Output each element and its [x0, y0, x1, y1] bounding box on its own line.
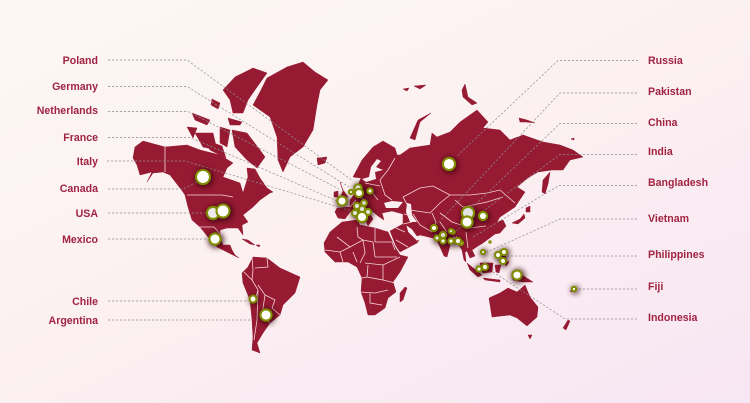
- labels: right column: [648, 55, 708, 324]
- world map: [133, 62, 583, 353]
- label: Canada: Canada: [60, 183, 98, 195]
- country borders: [165, 147, 515, 340]
- Eurasia: [335, 110, 583, 262]
- Arctic islands: [223, 68, 267, 113]
- Caribbean: [242, 239, 255, 245]
- label: Germany: Germany: [52, 81, 98, 93]
- label: Fiji: Fiji: [648, 281, 663, 293]
- label: Italy: Italy: [77, 156, 98, 168]
- Australia: [489, 285, 538, 326]
- Greenland: [253, 62, 328, 172]
- New Zealand: [563, 320, 570, 330]
- label: Mexico: Mexico: [62, 234, 99, 246]
- label: Poland: Poland: [63, 55, 98, 67]
- South America: [242, 257, 300, 353]
- Sakhalin and Japan: [542, 172, 550, 194]
- label: Bangladesh: Bangladesh: [648, 177, 708, 189]
- Fiji: [570, 291, 572, 292]
- markers: Asia: [431, 158, 487, 245]
- Africa: [324, 220, 408, 315]
- label: Russia: Russia: [648, 55, 683, 67]
- Iceland: [317, 157, 327, 165]
- North America: [133, 141, 273, 258]
- label: Vietnam: Vietnam: [648, 213, 689, 225]
- leader lines: [107, 60, 638, 320]
- label: USA: USA: [76, 208, 98, 220]
- Arctic Russia: [410, 113, 431, 140]
- markers: Americas: [196, 170, 272, 321]
- label: Argentina: Argentina: [49, 315, 98, 327]
- label: Netherlands: Netherlands: [37, 105, 98, 117]
- label: Pakistan: Pakistan: [648, 86, 692, 98]
- markers: Southeast Asia and Pacific: [476, 241, 576, 291]
- label: China: China: [648, 117, 678, 129]
- label: Chile: Chile: [72, 296, 98, 308]
- markers: Europe: [337, 184, 373, 222]
- marker shadows: [195, 157, 579, 324]
- label: France: France: [63, 132, 98, 144]
- labels: left column: [37, 55, 99, 327]
- UK and Ireland: [340, 182, 348, 198]
- label: Philippines: Philippines: [648, 249, 705, 261]
- Indonesia and Philippines: [467, 263, 482, 277]
- Madagascar: [400, 287, 407, 302]
- label: Indonesia: Indonesia: [648, 312, 698, 324]
- Seas: [362, 159, 417, 222]
- label: India: India: [648, 146, 673, 158]
